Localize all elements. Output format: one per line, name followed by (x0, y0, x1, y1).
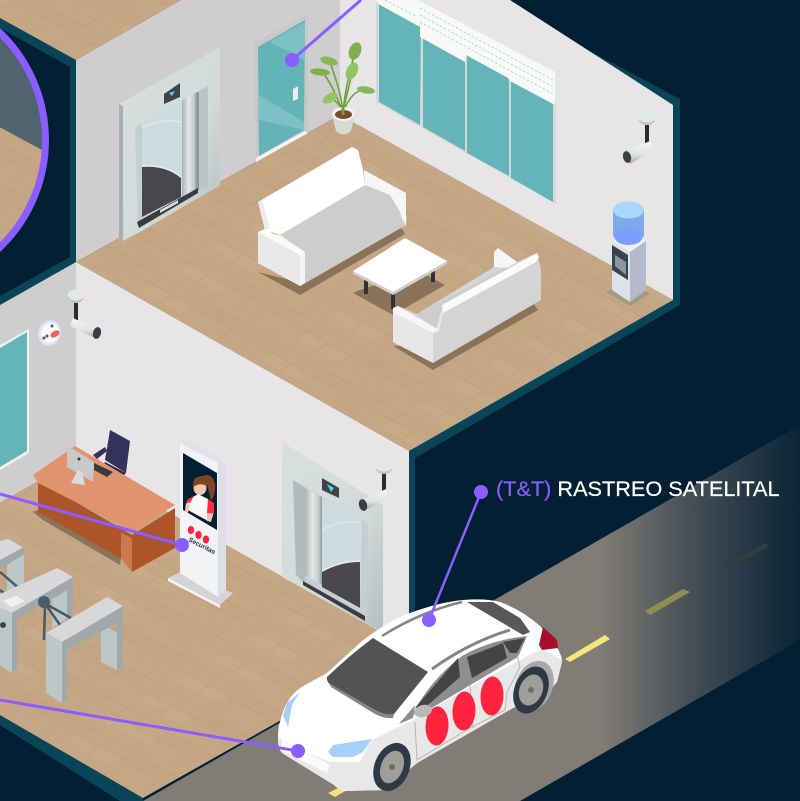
car (278, 599, 562, 797)
callout line: car tracking (422, 485, 488, 627)
middle turnstile (0, 568, 73, 673)
security camera right wall (622, 112, 656, 164)
lower wall window (0, 329, 29, 470)
plant (310, 40, 375, 134)
magnifier circle (0, 28, 49, 252)
info kiosk: Securitas (187, 537, 217, 556)
road (143, 425, 800, 801)
upper floor (76, 115, 673, 451)
lower floor (0, 460, 409, 798)
sofa back (258, 147, 407, 295)
far turnstile (0, 539, 24, 597)
lower elevator (282, 442, 383, 630)
near turnstile (46, 597, 123, 703)
info kiosk (168, 440, 233, 608)
reception desk (33, 445, 175, 572)
sofa front (393, 248, 541, 370)
alarm sensor (35, 317, 64, 349)
upper right wall (340, 0, 673, 300)
upper elevator (119, 47, 220, 241)
callout line: front of car (0, 700, 305, 758)
upper ceiling wood (0, 0, 181, 60)
coffee table (353, 238, 447, 315)
window with blinds (375, 0, 556, 204)
lower right wall (76, 262, 409, 650)
security camera left wall (68, 290, 102, 340)
label: satellite tracking: (T&T) RASTREO SATELITAL (496, 476, 780, 501)
glass door (254, 14, 308, 162)
water cooler (606, 202, 650, 306)
reception chair (93, 430, 130, 477)
lower left wall (0, 262, 76, 503)
upper left wall (76, 0, 340, 262)
callout line: reception (0, 494, 189, 552)
security camera lobby (358, 460, 393, 512)
callout line: door (285, 0, 361, 67)
